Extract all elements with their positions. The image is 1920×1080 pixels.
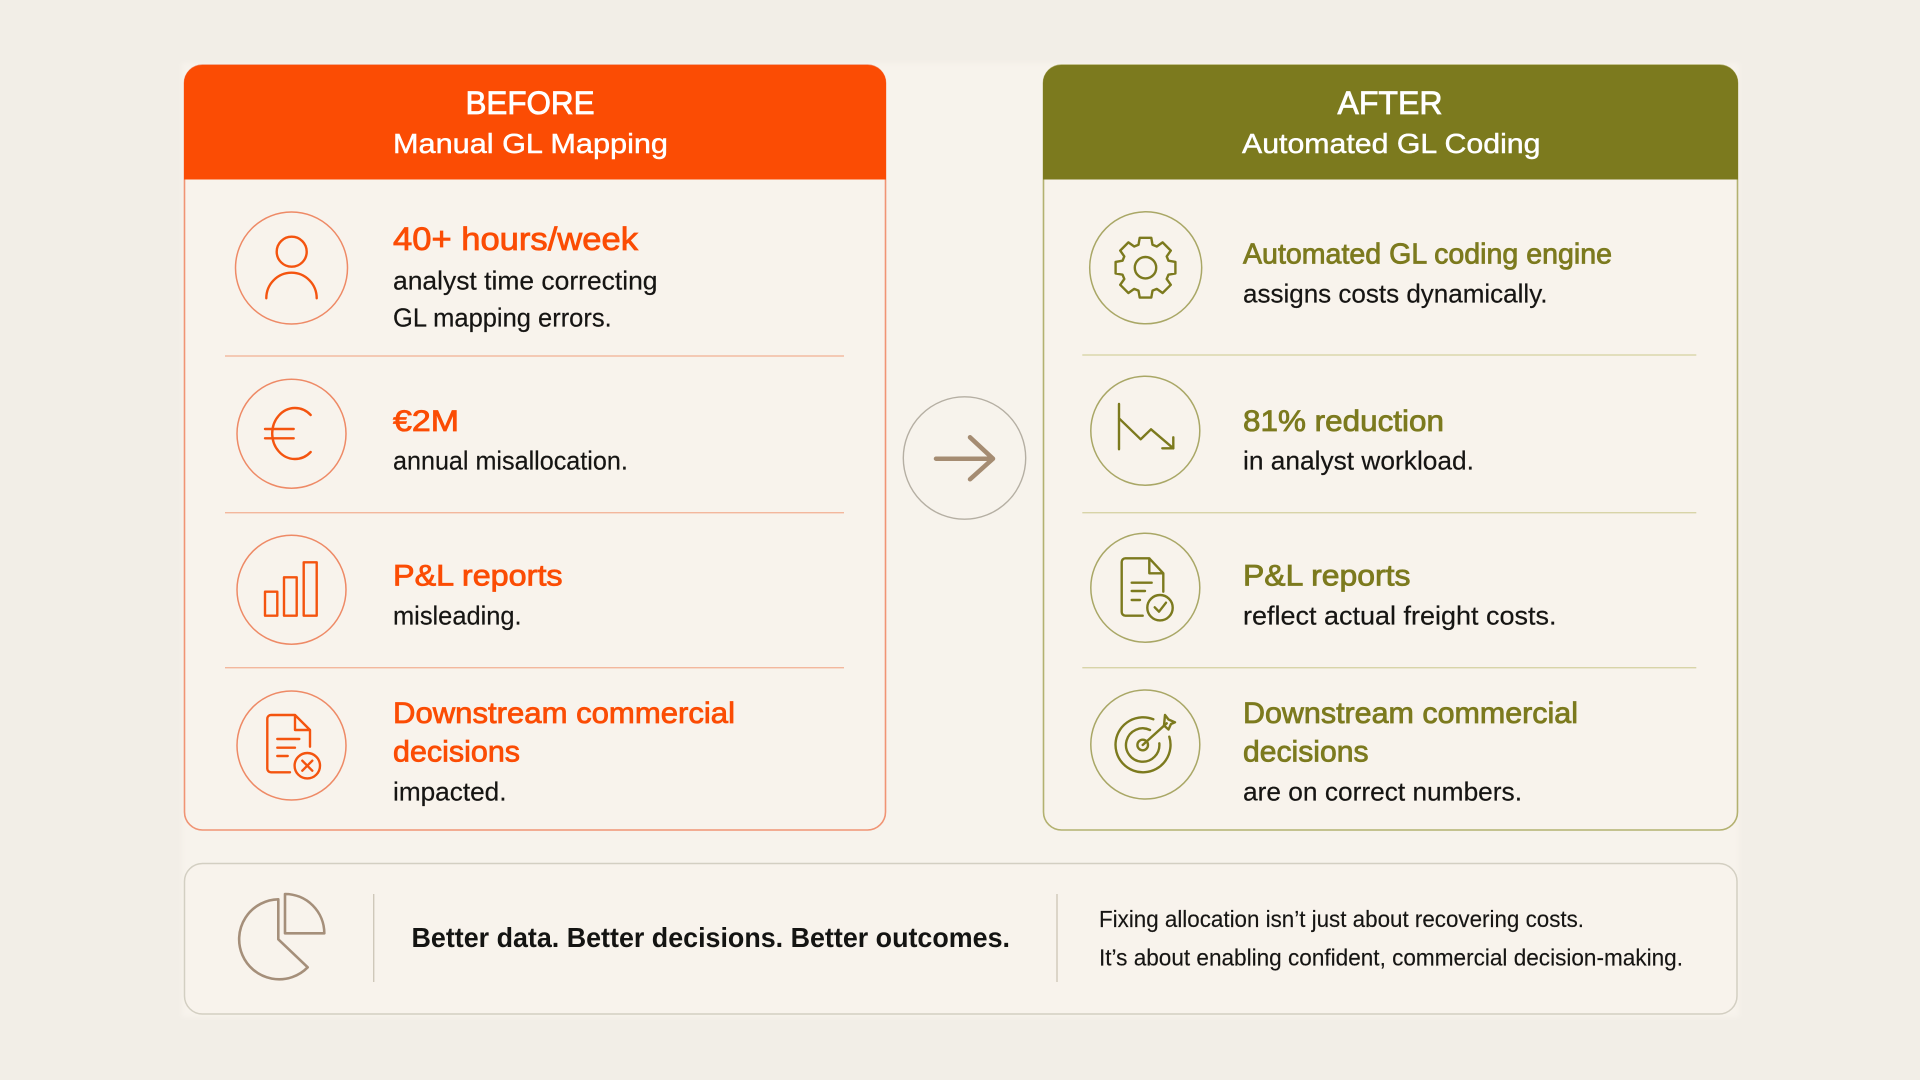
panel outline: after xyxy=(1044,65,1738,830)
row: downstream correct: are on correct numbers. xyxy=(1243,777,1522,807)
panel: summary xyxy=(184,864,1737,1014)
row: 81% reduction xyxy=(1091,376,1474,485)
row: P&L reports reflect: reflect actual freight costs. xyxy=(1243,601,1556,631)
icon: gear xyxy=(1090,212,1202,324)
row: €2M: annual misallocation. xyxy=(393,445,628,475)
panel: after xyxy=(1043,65,1738,830)
row: P&L reports reflect xyxy=(1091,533,1556,642)
icon: target with arrow xyxy=(1091,690,1200,799)
row: P&L reports reflect: P&L reports xyxy=(1243,559,1410,592)
row: P&L reports misleading xyxy=(237,535,563,644)
row: downstream impacted: decisions xyxy=(393,736,520,769)
icon: declining chart xyxy=(1091,376,1200,485)
row: automated engine: Automated GL coding engine xyxy=(1243,238,1612,270)
row: downstream correct xyxy=(1091,690,1578,807)
icon: document with check xyxy=(1091,533,1200,642)
arrow xyxy=(903,397,1026,519)
row: 40+ hours/week: 40+ hours/week xyxy=(393,221,639,257)
icon: document with cross xyxy=(237,691,346,800)
row: 40+ hours/week: GL mapping errors. xyxy=(393,303,612,333)
row: 40+ hours/week: analyst time correcting xyxy=(393,265,658,295)
header: after: AFTER xyxy=(1338,85,1442,121)
row: €2M: €2M xyxy=(393,405,459,438)
icon: bar chart xyxy=(237,535,346,644)
row: 40+ hours/week xyxy=(236,212,658,333)
row: 81% reduction: in analyst workload. xyxy=(1243,445,1474,475)
row: downstream correct: decisions xyxy=(1243,736,1368,769)
header: after: Automated GL Coding xyxy=(1242,128,1540,159)
header: after xyxy=(1043,65,1738,180)
icon: person xyxy=(236,212,348,324)
row: P&L reports misleading: P&L reports xyxy=(393,559,563,592)
header: before: Manual GL Mapping xyxy=(393,128,668,159)
row: downstream impacted: impacted. xyxy=(393,777,506,807)
row: automated engine: assigns costs dynamically. xyxy=(1243,278,1548,308)
row: downstream correct: Downstream commercial xyxy=(1243,697,1578,730)
panel outline: before xyxy=(184,65,886,830)
slogan: Better data. Better decisions. Better outcomes. xyxy=(412,922,1010,953)
icon: pie chart xyxy=(239,894,324,979)
row: €2M xyxy=(237,379,628,488)
closing statement: It’s about enabling confident, commercial decision-making. xyxy=(1099,945,1683,971)
header: before: BEFORE xyxy=(466,85,594,121)
row: 81% reduction: 81% reduction xyxy=(1243,405,1444,438)
header: before xyxy=(184,65,886,180)
row: downstream impacted: Downstream commercial xyxy=(393,697,735,730)
row: P&L reports misleading: misleading. xyxy=(393,601,522,631)
closing statement xyxy=(1099,906,1683,971)
panel: before xyxy=(184,65,886,830)
icon: euro xyxy=(237,379,346,488)
row: automated engine xyxy=(1090,212,1612,324)
row: downstream impacted xyxy=(237,691,735,807)
closing statement: Fixing allocation isn’t just about recovering costs. xyxy=(1099,906,1584,932)
